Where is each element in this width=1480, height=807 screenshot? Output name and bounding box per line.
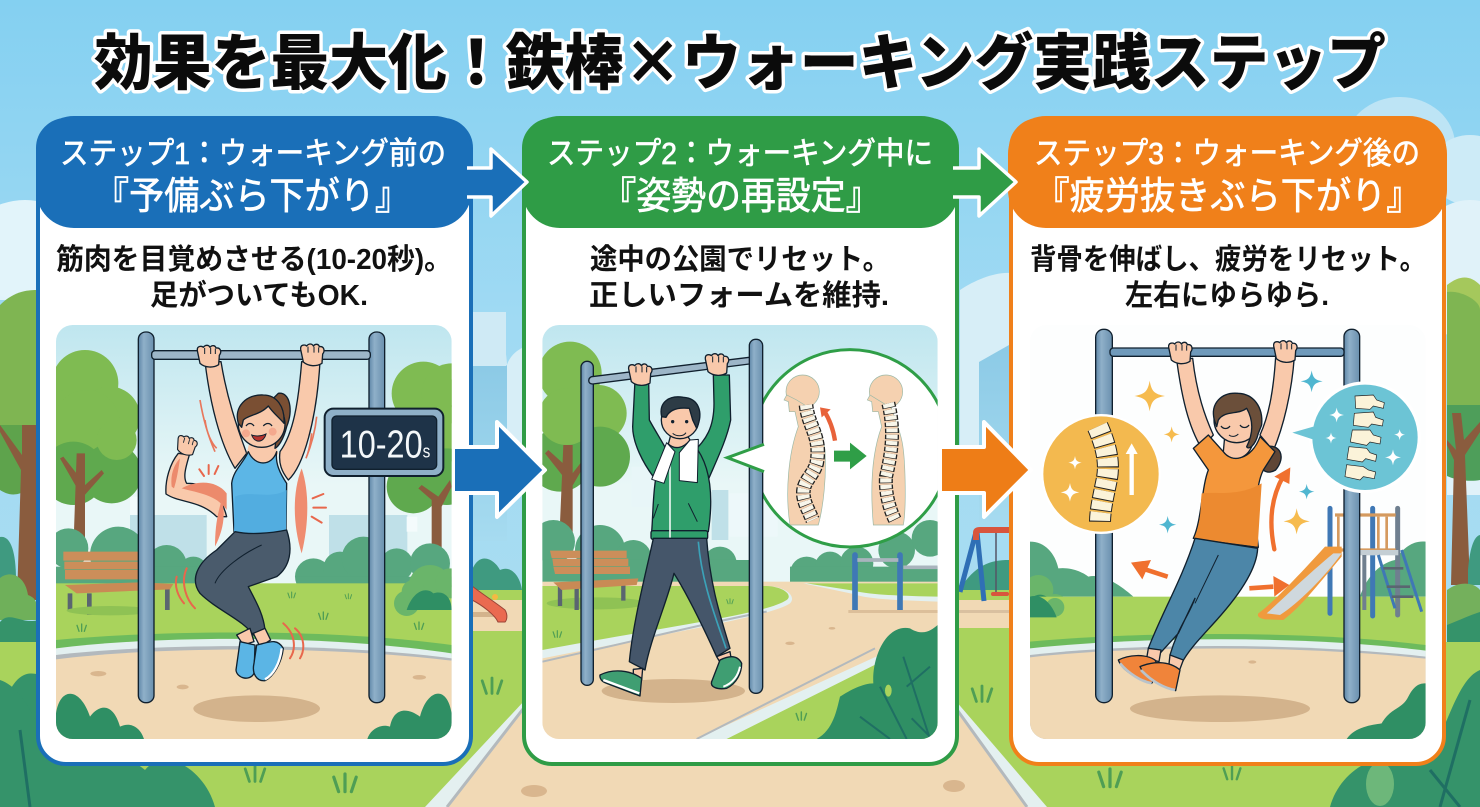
arrow: large orange xyxy=(942,422,1031,517)
panel 1 heading line 1: ステップ1：ウォーキング前の xyxy=(60,136,446,171)
arrow: large blue xyxy=(455,422,545,517)
posture callout circle xyxy=(751,350,949,547)
panel 2 illustration: man hanging with posture callout xyxy=(528,325,949,742)
side tree right xyxy=(1447,278,1480,350)
panel 2 frame xyxy=(524,120,957,764)
panel 1 description: 筋肉を目覚めさせる(10-20秒)。 xyxy=(56,243,452,276)
panel 2 heading line 1: ステップ2：ウォーキング中に xyxy=(547,136,933,171)
panel 3 frame xyxy=(1011,120,1444,764)
panel 3 heading line 2: 『疲労抜きぶら下がり』 xyxy=(1034,176,1422,218)
panel 3 header band xyxy=(1008,116,1447,228)
panel 3 description xyxy=(1030,243,1426,312)
panel 3 description: 背骨を伸ばし、疲労をリセット。 xyxy=(1030,243,1426,276)
left spine badge xyxy=(1041,414,1161,534)
panel 1 description: 足がついてもOK. xyxy=(150,278,368,312)
timer display xyxy=(325,409,443,476)
arrow: header step 2 to 3 xyxy=(953,149,1016,216)
panel: step 2 xyxy=(522,116,959,764)
swing xyxy=(960,527,1009,601)
timer display: 10-20s xyxy=(340,422,430,466)
panel 3 description: 左右にゆらゆら. xyxy=(1125,279,1329,312)
panel: step 3 xyxy=(1008,116,1447,764)
ground xyxy=(0,642,1480,807)
callout tail xyxy=(727,444,765,472)
center path xyxy=(425,700,1047,807)
left gap sky xyxy=(472,312,507,365)
panel: step 1 xyxy=(36,116,482,764)
side tree left xyxy=(0,290,38,430)
title: 効果を最大化！鉄棒×ウォーキング実践ステップ xyxy=(94,13,1386,102)
panel 3 heading line 1: ステップ3：ウォーキング後の xyxy=(1034,136,1420,171)
panel 1 frame xyxy=(38,120,471,764)
panel 2 description: 途中の公園でリセット。 xyxy=(590,243,890,276)
panel 1 heading line 2: 『予備ぶら下がり』 xyxy=(94,176,410,218)
panel 2 description xyxy=(589,243,890,312)
right gap sky xyxy=(960,273,1010,445)
panel 1 illustration: woman hanging with timer xyxy=(56,325,452,739)
panel 1 description xyxy=(56,243,452,312)
right spine badge xyxy=(1292,381,1421,493)
panel 2 description: 正しいフォームを維持. xyxy=(589,279,889,312)
panel 2 heading line 2: 『姿勢の再設定』 xyxy=(602,176,880,218)
panel 1 header band xyxy=(36,116,472,228)
panel 3 illustration: woman swinging gently with spine details xyxy=(1023,325,1426,740)
arrow: header step 1 to 2 xyxy=(467,149,527,216)
panel 2 header band xyxy=(522,116,959,228)
